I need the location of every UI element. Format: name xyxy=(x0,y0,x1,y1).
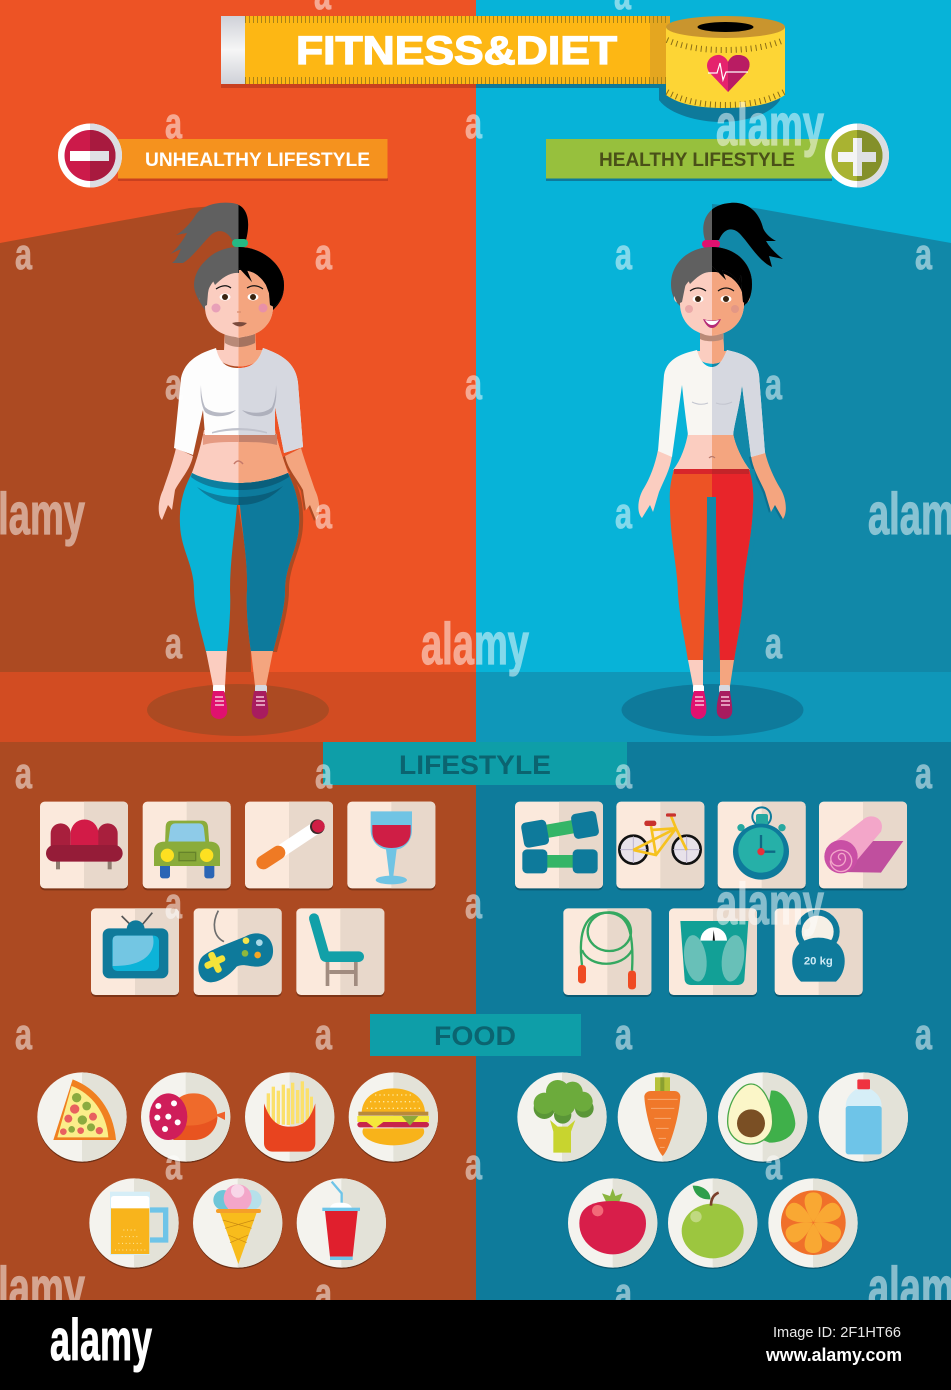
icon: yoga mat xyxy=(819,802,907,890)
icon: chair xyxy=(296,908,384,997)
watermarks: a xyxy=(165,99,182,148)
panel: healthy background xyxy=(476,0,951,742)
watermarks: a xyxy=(15,230,32,279)
panel: unhealthy lifestyle icons xyxy=(40,802,435,997)
watermarks: a xyxy=(915,749,932,798)
watermarks: a xyxy=(615,1269,632,1318)
lower legs xyxy=(688,660,734,693)
watermarks: a xyxy=(465,879,482,928)
icon: hamburger xyxy=(349,1072,438,1163)
footer logo: alamy xyxy=(50,1308,152,1373)
sneakers xyxy=(211,691,268,719)
face xyxy=(197,247,284,337)
icon: water bottle xyxy=(819,1072,908,1163)
watermarks: a xyxy=(315,489,332,538)
watermarks: alamy xyxy=(716,93,824,158)
image id: Image ID: 2F1HT66 xyxy=(773,1324,901,1341)
icon: beer mug xyxy=(89,1178,179,1269)
banner: healthy lifestyle: HEALTHY LIFESTYLE xyxy=(599,149,795,171)
red leggings xyxy=(670,469,753,661)
watermarks: alamy xyxy=(421,612,529,677)
white top xyxy=(658,350,765,457)
banner: unhealthy lifestyle: UNHEALTHY LIFESTYLE xyxy=(145,149,370,171)
banner: healthy lifestyle xyxy=(546,139,832,181)
white top xyxy=(174,348,303,455)
figure: fit woman xyxy=(638,203,786,719)
icon: carrot xyxy=(618,1072,707,1163)
panel: lower right healthy area xyxy=(476,742,951,1300)
ponytail xyxy=(170,203,248,263)
icon: tomato xyxy=(568,1178,657,1269)
tape roll with heart icon xyxy=(659,16,785,122)
ponytail xyxy=(703,203,783,267)
icon: bicycle xyxy=(616,802,704,890)
footer bar xyxy=(0,1300,951,1390)
heading: lifestyle: LIFESTYLE xyxy=(399,750,551,780)
watermarks: a xyxy=(765,1140,782,1189)
watermarks: a xyxy=(315,749,332,798)
icon: kettlebell xyxy=(775,908,863,997)
watermarks: a xyxy=(615,230,632,279)
watermarks: a xyxy=(465,1140,482,1189)
neck and arms xyxy=(638,328,786,519)
icon: car xyxy=(143,802,231,890)
icon: sausage xyxy=(141,1072,230,1163)
watermarks: a xyxy=(165,360,182,409)
icon: ice cream cone xyxy=(193,1178,282,1269)
icon: broccoli xyxy=(517,1072,607,1163)
icon: sofa xyxy=(40,802,128,890)
watermarks: a xyxy=(615,489,632,538)
icon: kettlebell: 20 kg xyxy=(804,956,833,968)
watermarks: a xyxy=(465,99,482,148)
blue leggings xyxy=(180,473,299,652)
icon: french fries xyxy=(245,1072,334,1163)
banner: unhealthy lifestyle xyxy=(118,139,388,181)
panel: healthy food icons xyxy=(517,1072,908,1269)
figure: overweight woman xyxy=(159,203,319,719)
title ribbon: measuring tape xyxy=(221,16,671,88)
watermarks: a xyxy=(765,360,782,409)
icon: avocado xyxy=(718,1072,807,1163)
icon: television xyxy=(91,908,179,997)
heading: food xyxy=(370,1014,581,1056)
icon: game controller xyxy=(194,908,282,997)
heading: food: FOOD xyxy=(434,1021,516,1051)
hair xyxy=(671,247,752,306)
heading: lifestyle xyxy=(323,742,627,785)
watermarks: a xyxy=(165,879,182,928)
watermarks: a xyxy=(315,1010,332,1059)
icon: cigarette xyxy=(245,802,333,890)
lower legs xyxy=(206,651,273,693)
hair xyxy=(194,247,284,310)
panel: unhealthy background xyxy=(0,0,476,742)
face xyxy=(673,247,752,335)
watermarks: a xyxy=(165,1140,182,1189)
icon: dumbbells xyxy=(515,802,603,890)
watermarks: a xyxy=(465,360,482,409)
watermarks: a xyxy=(165,619,182,668)
neck and arms xyxy=(159,330,319,520)
icon: soda cup xyxy=(297,1178,386,1269)
panel: lower left unhealthy area xyxy=(0,742,476,1300)
sneakers xyxy=(691,691,732,719)
watermarks: a xyxy=(615,749,632,798)
watermarks: alamy xyxy=(716,872,824,937)
watermarks: a xyxy=(915,230,932,279)
icon: minus badge xyxy=(58,124,122,188)
website: www.alamy.com xyxy=(765,1345,902,1365)
icon: stopwatch xyxy=(718,802,806,890)
icon: bathroom scale xyxy=(669,908,757,997)
watermarks: a xyxy=(315,230,332,279)
belly xyxy=(673,433,750,470)
belly xyxy=(190,430,290,484)
icon: orange slice xyxy=(768,1178,858,1269)
watermarks: a xyxy=(615,1010,632,1059)
panel: unhealthy food icons xyxy=(37,1072,438,1269)
watermarks: a xyxy=(315,1269,332,1318)
watermarks: a xyxy=(15,749,32,798)
icon: pizza xyxy=(37,1072,127,1163)
icon: jump rope xyxy=(563,908,651,997)
watermarks: a xyxy=(15,1010,32,1059)
icon: green apple xyxy=(668,1178,757,1269)
icon: plus badge xyxy=(825,124,889,188)
watermarks: a xyxy=(915,1010,932,1059)
watermarks: a xyxy=(765,619,782,668)
icon: wine glass xyxy=(347,802,435,890)
panel: healthy lifestyle icons xyxy=(515,802,907,997)
title text: FITNESS&DIET xyxy=(296,29,617,73)
